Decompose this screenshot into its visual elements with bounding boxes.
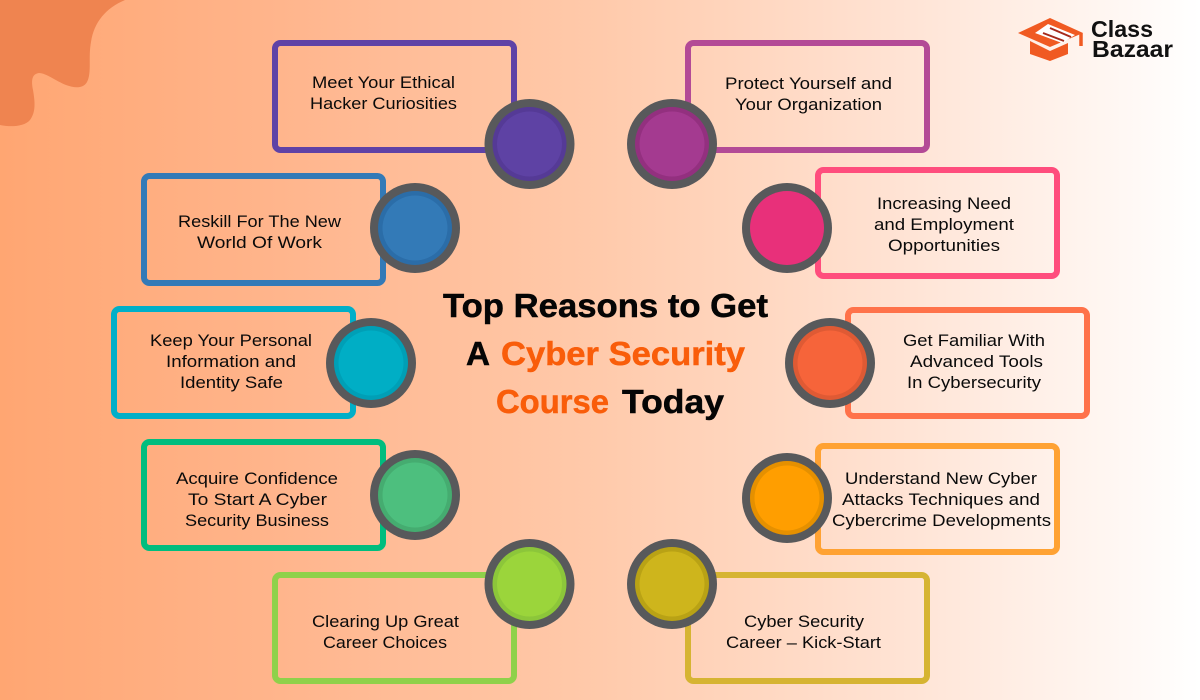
- logo wordmark: [1091, 16, 1173, 62]
- panel: Cyber Security Career – Kick-Start: Career – Kick-Start: [726, 633, 881, 652]
- panel: Acquire Confidence To Start A Cyber Security Business: [144, 442, 460, 548]
- panel: Acquire Confidence To Start A Cyber Security Business: To Start A Cyber: [188, 490, 327, 509]
- panel: Reskill For The New World Of Work: World Of Work: [197, 233, 323, 252]
- panel: Cyber Security Career – Kick-Start: [627, 539, 927, 681]
- panel: Clearing Up Great Career Choices: Career Choices: [323, 633, 447, 652]
- title: Today: [622, 383, 725, 420]
- title: [443, 287, 768, 420]
- panel: Meet Your Ethical Hacker Curiosities: Meet Your Ethical: [312, 73, 455, 92]
- panel: Keep Your Personal Information and Identity Safe: [114, 309, 416, 416]
- panel: Increasing Need and Employment Opportunities: Increasing Need: [877, 194, 1011, 213]
- logo: Class Bazaar: [1018, 16, 1173, 62]
- panel: Protect Yourself and Your Organization: [627, 43, 927, 189]
- panel: Keep Your Personal Information and Identity Safe: Identity Safe: [180, 373, 283, 392]
- panel: Meet Your Ethical Hacker Curiosities: [275, 43, 574, 189]
- panel: Acquire Confidence To Start A Cyber Security Business: Security Business: [185, 511, 329, 530]
- panel: Understand New Cyber Attacks Techniques and Cybercrime Developments: Understand New Cyber: [845, 469, 1037, 488]
- logo wordmark: Bazaar: [1092, 36, 1173, 62]
- panel: Increasing Need and Employment Opportunities: and Employment: [874, 215, 1014, 234]
- panel: Get Familiar With Advanced Tools In Cybersecurity: [785, 310, 1087, 416]
- panel: Clearing Up Great Career Choices: Clearing Up Great: [312, 612, 459, 631]
- panel: Understand New Cyber Attacks Techniques and Cybercrime Developments: Attacks Techniques and: [842, 490, 1040, 509]
- panel: Protect Yourself and Your Organization: Protect Yourself and: [725, 74, 892, 93]
- panel: Keep Your Personal Information and Identity Safe: Information and: [166, 352, 296, 371]
- panel: Get Familiar With Advanced Tools In Cybersecurity: Advanced Tools: [910, 352, 1043, 371]
- icon: graduation cap: [1018, 18, 1083, 61]
- panel: Understand New Cyber Attacks Techniques and Cybercrime Developments: [742, 446, 1057, 552]
- panel: Clearing Up Great Career Choices: [275, 539, 574, 681]
- panel: Reskill For The New World Of Work: Reskill For The New: [178, 212, 342, 231]
- title: Course: [496, 383, 609, 420]
- title: A: [466, 335, 490, 372]
- panel: Protect Yourself and Your Organization: Your Organization: [735, 95, 882, 114]
- logo wordmark: Class: [1091, 16, 1153, 42]
- panel: Keep Your Personal Information and Identity Safe: Keep Your Personal: [150, 331, 312, 350]
- panel: Get Familiar With Advanced Tools In Cybersecurity: Get Familiar With: [903, 331, 1045, 350]
- panel: Cyber Security Career – Kick-Start: Cyber Security: [744, 612, 865, 631]
- panel: Meet Your Ethical Hacker Curiosities: Hacker Curiosities: [310, 94, 457, 113]
- panel: Understand New Cyber Attacks Techniques and Cybercrime Developments: Cybercrime Developments: [832, 511, 1051, 530]
- title: Cyber Security: [501, 335, 746, 372]
- panel: Increasing Need and Employment Opportunities: [742, 170, 1057, 276]
- title: Top Reasons to Get: [443, 287, 768, 324]
- panel: Reskill For The New World Of Work: [144, 176, 460, 283]
- decorative corner blob: [0, 0, 125, 126]
- panel: Acquire Confidence To Start A Cyber Security Business: Acquire Confidence: [176, 469, 338, 488]
- panel: Get Familiar With Advanced Tools In Cybersecurity: In Cybersecurity: [907, 373, 1042, 392]
- panel: Increasing Need and Employment Opportunities: Opportunities: [888, 236, 1000, 255]
